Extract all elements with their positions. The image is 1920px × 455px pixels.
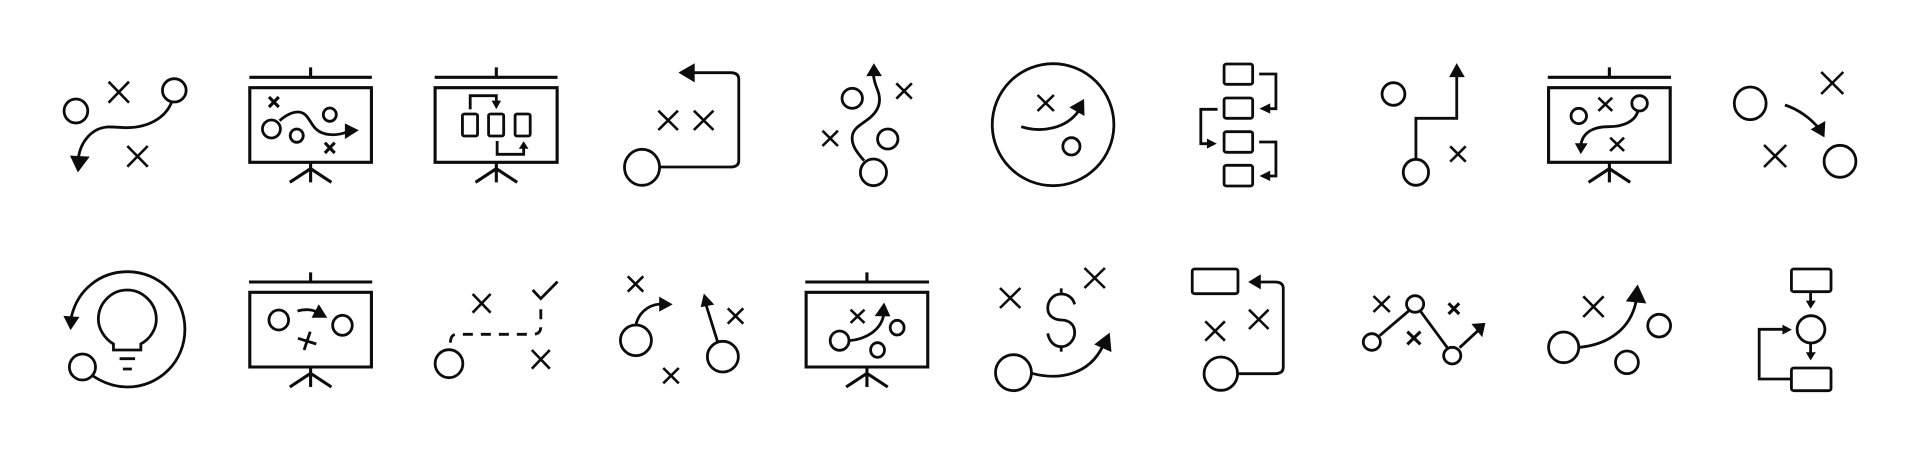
- icon: stepped route upward: [1382, 64, 1466, 185]
- icon: looped route around two crosses: [624, 64, 739, 185]
- icon: dashed route to check mark: [435, 282, 558, 378]
- icon: play curve with arrow down-left: [64, 79, 186, 172]
- icon: two circles with separate arrows: [620, 276, 743, 383]
- icon: dollar sign with rising arrow: [996, 268, 1111, 391]
- icon: presentation board with wavy play: [249, 67, 372, 182]
- icon: circle route looping to rectangle: [1192, 269, 1283, 390]
- icon: circle with play inside: [992, 64, 1114, 186]
- icon: flowchart with feedback loop: [1759, 269, 1831, 391]
- icon: presentation board with process blocks: [435, 67, 558, 182]
- icon: presentation board with two circles: [249, 272, 372, 387]
- icon: circle to circle arrow with crosses: [1734, 72, 1856, 177]
- icon: winding upward route: [822, 64, 912, 186]
- icon: zigzag route through three circles: [1363, 296, 1485, 364]
- icon: curved arrow with three circles: [1549, 285, 1671, 374]
- icon: presentation board with curve to lower left: [1548, 67, 1671, 182]
- icon: presentation board with rising curve: [805, 272, 929, 387]
- icon: light bulb with circular arrow: [64, 272, 185, 387]
- icon: vertical flowchart with four boxes: [1201, 64, 1276, 186]
